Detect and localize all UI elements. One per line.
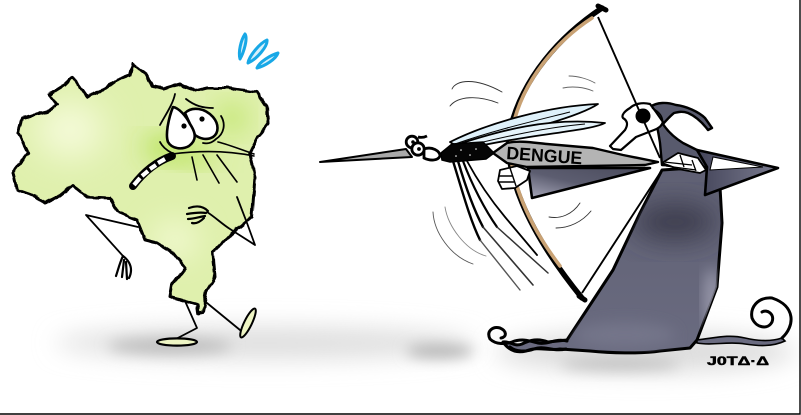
skeleton hand: bow grip [498,166,530,189]
map body [13,64,268,313]
right arm and hand [187,197,255,245]
face: mouth [133,156,172,186]
icon: blue sweat drops [239,34,278,68]
mosquito legs [453,161,548,290]
legs and feet [157,301,258,346]
robe tail: right spiral [697,298,791,346]
ground shadow: left [55,327,475,359]
skeleton hand: string grip [662,153,706,173]
left arm and hand [86,215,138,279]
mosquito head [406,136,440,160]
mosquito wings [450,104,605,150]
character: Brazil map [13,64,268,346]
bow string [582,17,662,293]
mosquito proboscis [320,149,412,162]
reaper robe [489,167,791,353]
mosquito body [441,142,494,162]
artist signature: J0TΔ·Δ [707,354,770,368]
face: brows and cheeks [160,94,224,153]
reaper left sleeve [528,168,650,198]
sleeve white inner [710,157,763,170]
reaper right sleeve [697,150,778,195]
DENGUE label: DENGUE [506,143,583,168]
map shading [36,102,244,260]
bow [509,6,606,300]
robe tail: left spiral [489,328,567,351]
motion lines [433,76,595,264]
ground shadow: right [495,332,795,372]
face: eyes [167,107,218,148]
reaper hood and skull [610,103,712,167]
arrow shaft with DENGUE label [493,142,658,168]
face: wrinkles [172,142,254,183]
